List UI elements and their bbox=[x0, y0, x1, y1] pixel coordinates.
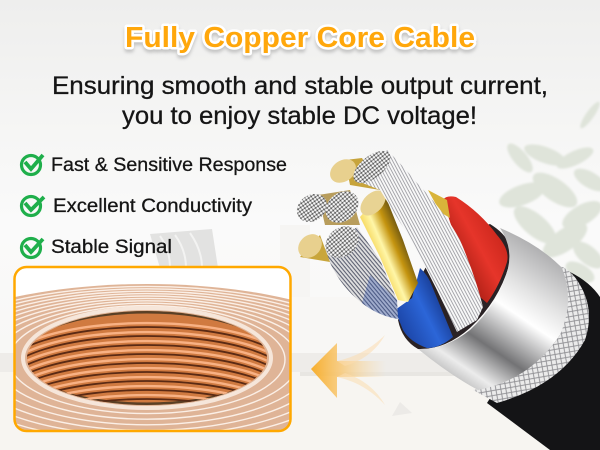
copper coil panel bbox=[13, 266, 292, 432]
feature: excellent conductivity: Excellent Conductivity bbox=[53, 195, 252, 217]
cable illustration bbox=[291, 145, 600, 450]
large silver strand bbox=[348, 145, 483, 332]
feature list bbox=[22, 154, 287, 258]
subtitle: you to enjoy stable DC voltage! bbox=[122, 102, 477, 130]
lower silver strand bbox=[319, 220, 398, 319]
feature: stable signal: Stable Signal bbox=[51, 236, 172, 258]
blue insulated wire bbox=[395, 268, 453, 348]
black outer jacket bbox=[487, 272, 600, 450]
small gold and silver strand ends bbox=[291, 154, 380, 263]
copper coil bbox=[16, 284, 290, 430]
sofa pillow bbox=[150, 229, 218, 268]
thin gold strand behind bbox=[428, 190, 450, 218]
background plant bbox=[496, 100, 600, 287]
arrow pointing to coil bbox=[311, 335, 386, 405]
large gold strand bbox=[356, 186, 418, 302]
feature: fast and sensitive response: Fast & Sensitive Response bbox=[51, 154, 287, 176]
subtitle bbox=[52, 72, 548, 130]
dark cable mouth bbox=[398, 224, 511, 349]
braided collar bbox=[473, 265, 589, 403]
subtitle: Ensuring smooth and stable output current, bbox=[52, 72, 548, 100]
red insulated wire bbox=[443, 196, 508, 303]
metal sleeve bbox=[418, 228, 568, 390]
title: Fully Copper Core Cable bbox=[125, 22, 475, 54]
title: Fully Copper Core Cable bbox=[125, 25, 475, 57]
